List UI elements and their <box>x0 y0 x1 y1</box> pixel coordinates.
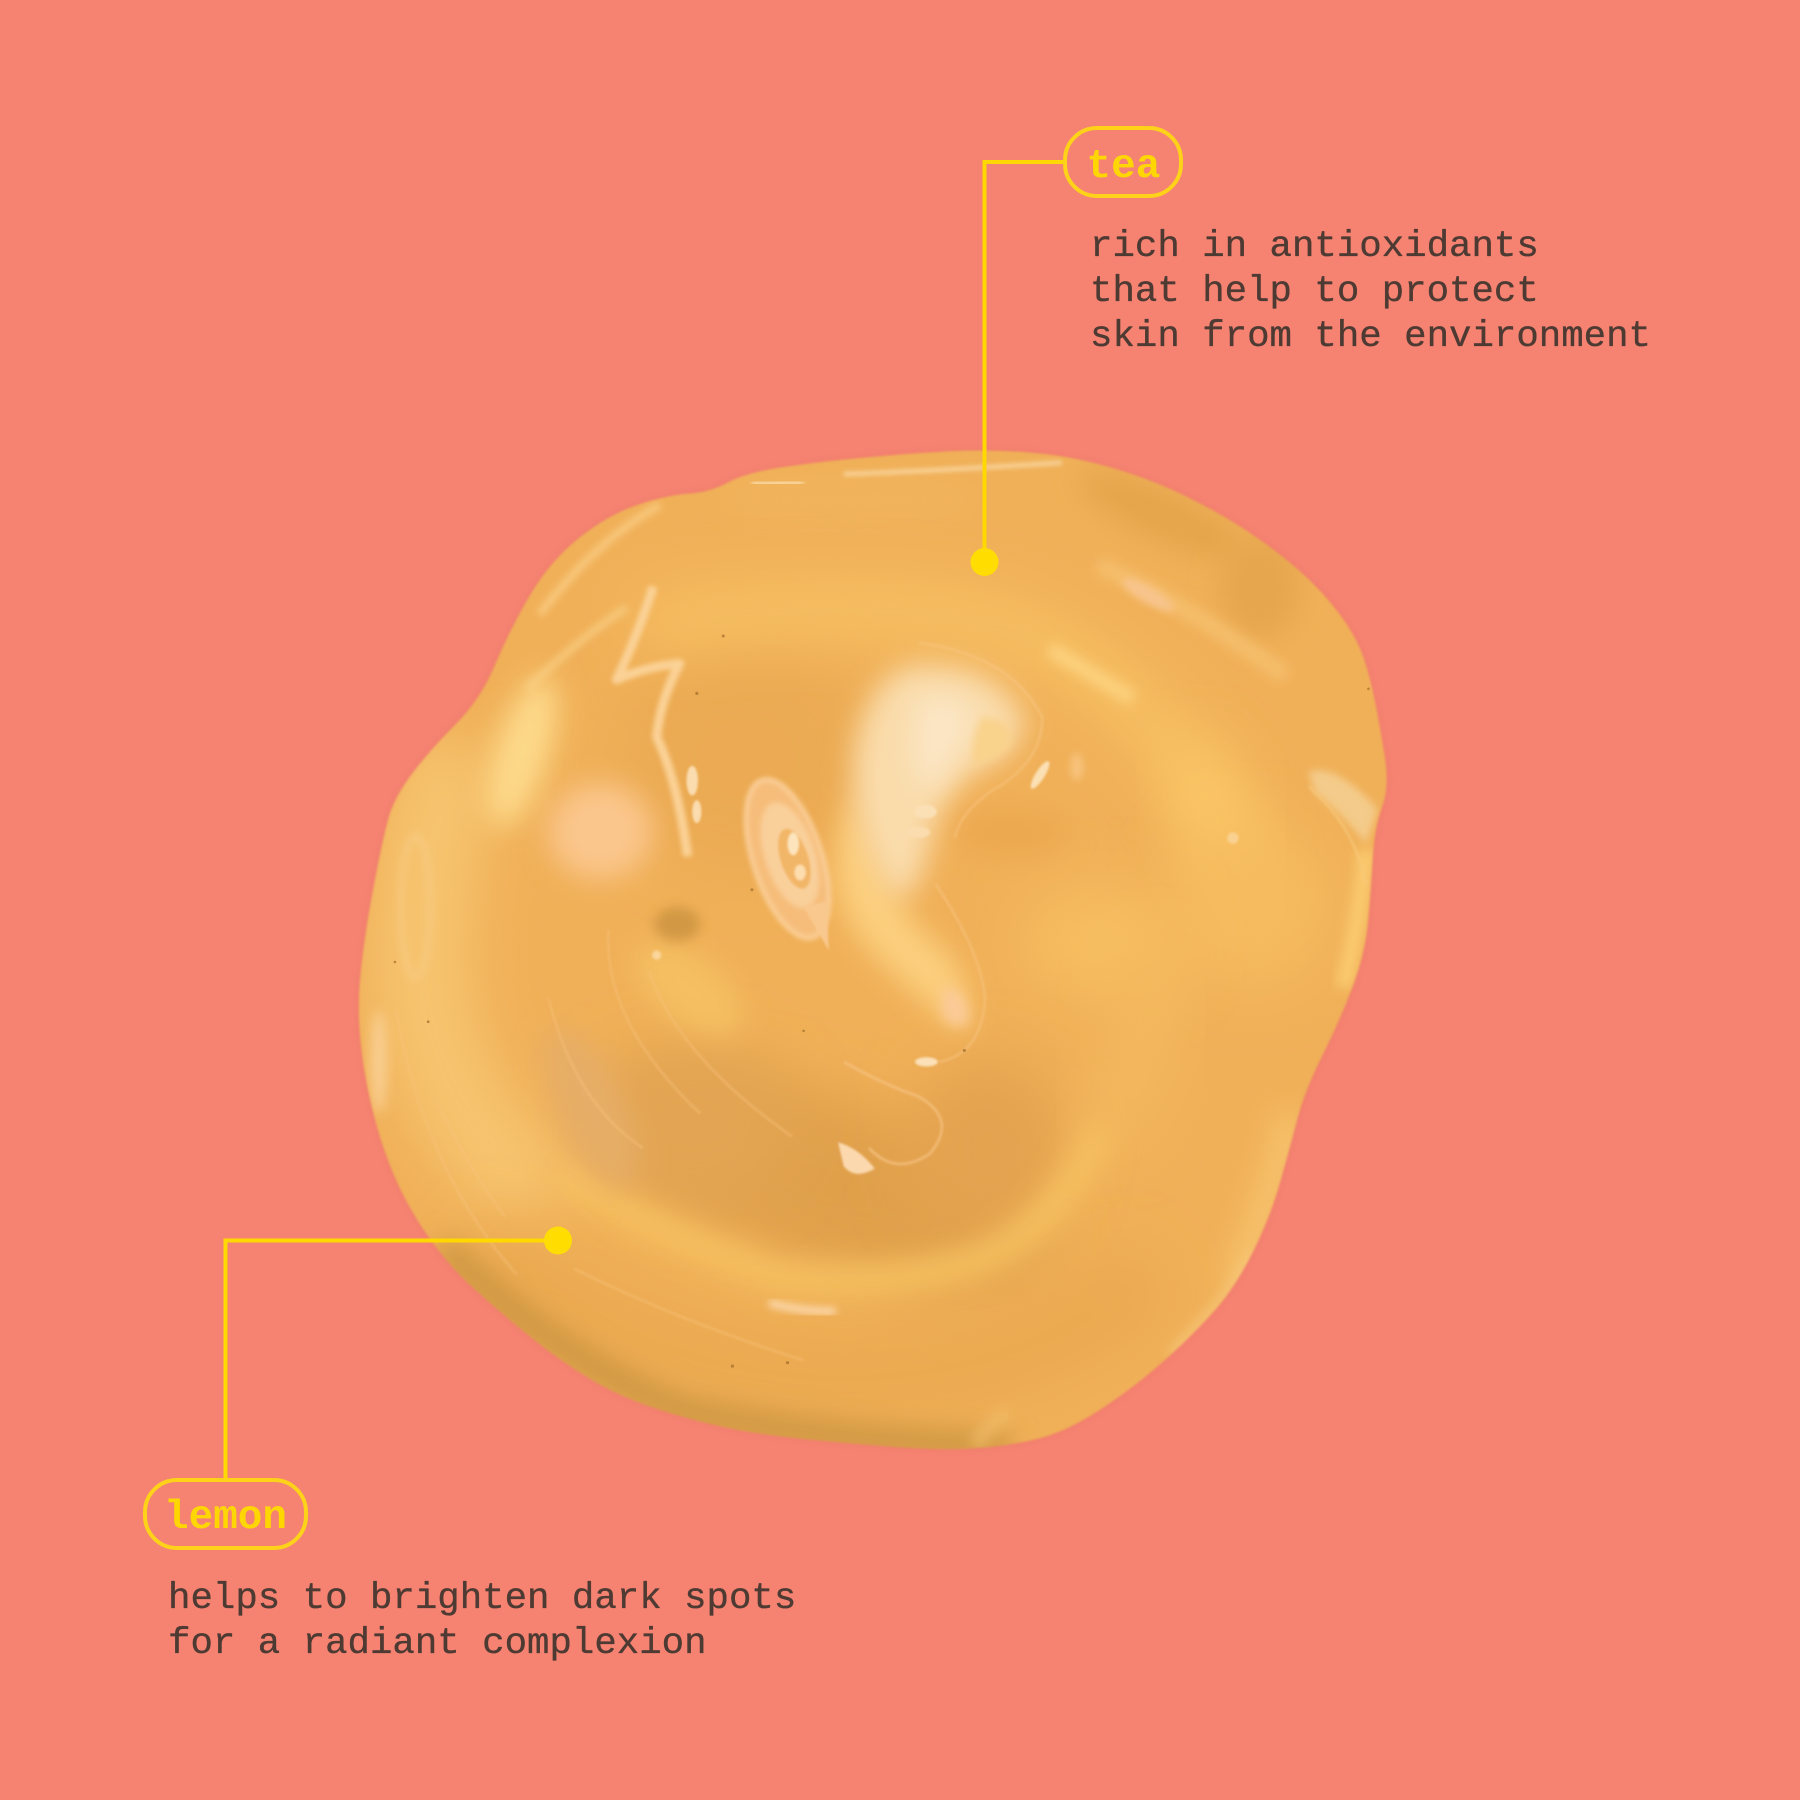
lemon description: helps to brighten dark spots <box>168 1578 796 1620</box>
lemon pill label: lemon <box>164 1495 287 1541</box>
right edge strokes <box>1171 1251 1257 1355</box>
tea description: that help to protect <box>1090 271 1539 313</box>
lower outer band <box>512 1252 533 1258</box>
thin outline of highlight <box>918 643 1042 1062</box>
top edge streaks <box>844 463 1062 474</box>
tea pill label <box>1065 128 1181 196</box>
infographic canvas <box>143 126 1648 1661</box>
zigzag reflection <box>616 587 688 856</box>
specks <box>394 634 1370 1368</box>
swirl rings <box>741 774 834 943</box>
fine swirl strokes <box>439 930 804 1361</box>
lemon-yellow highlight and pink glow <box>472 669 573 835</box>
callout: lemon <box>145 1226 796 1665</box>
tea description: skin from the environment <box>1090 316 1651 358</box>
small droplets <box>687 766 698 796</box>
left swirl <box>401 836 430 978</box>
dimple shadow <box>654 907 700 941</box>
yellow arc below pool <box>559 1125 1102 1282</box>
upper right streaks <box>1097 565 1286 676</box>
bottom highlight <box>769 1303 836 1311</box>
tea description: rich in antioxidants <box>1090 226 1539 268</box>
lower loop highlight <box>838 1142 875 1174</box>
central pale highlight <box>836 792 968 1033</box>
callout: tea <box>970 128 1651 576</box>
left light band <box>422 746 551 1194</box>
yellow sweep around upper pool <box>662 584 1187 758</box>
lemon leader line <box>226 1240 558 1479</box>
lemon description: for a radiant complexion <box>168 1623 707 1665</box>
soft tonal areas <box>722 1093 961 1261</box>
tea pill label: tea <box>1086 144 1160 190</box>
tea marker dot <box>970 548 998 576</box>
tea leader line <box>984 162 1064 562</box>
lemon pill label <box>145 1480 306 1548</box>
right lobe <box>1309 770 1378 844</box>
lemon marker dot <box>544 1226 572 1254</box>
lotion swatch <box>358 450 1388 1450</box>
